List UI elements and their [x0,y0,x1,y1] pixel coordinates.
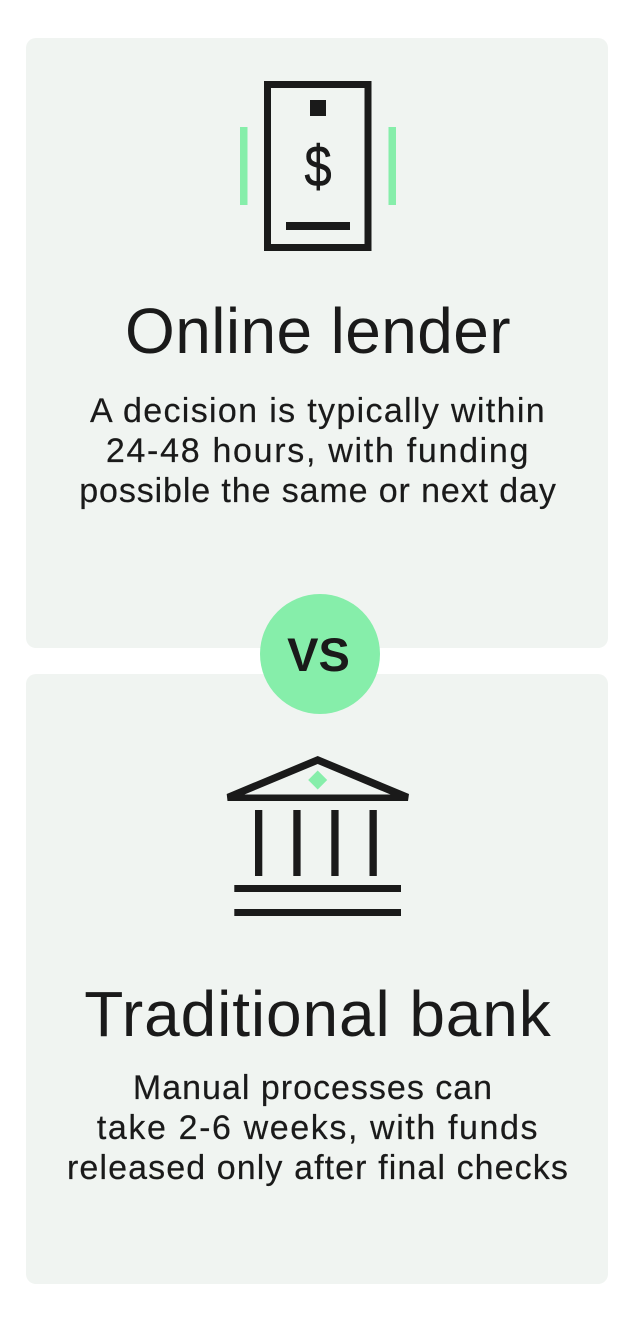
text: traditional bank description: released only after final checks [67,1149,569,1187]
icon: phone with dollar [240,81,396,251]
text: online lender description: A decision is typically within [90,392,546,430]
text: traditional bank description: Manual processes can [133,1069,493,1107]
icon: bank building [226,756,409,916]
text: traditional bank description: take 2-6 weeks, with funds [97,1109,539,1147]
text: traditional bank description [67,1069,569,1187]
text: online lender description: 24-48 hours, with funding [106,432,530,470]
heading: traditional bank: Traditional bank [84,978,552,1050]
panel: traditional bank [26,674,608,1284]
icon: phone with dollar: $ [304,135,332,199]
badge: vs [260,594,380,714]
text: online lender description: possible the same or next day [79,472,557,510]
text: online lender description [79,392,557,510]
panel: online lender [26,38,608,648]
heading: online lender: Online lender [125,295,511,367]
badge: vs: VS [287,628,350,681]
